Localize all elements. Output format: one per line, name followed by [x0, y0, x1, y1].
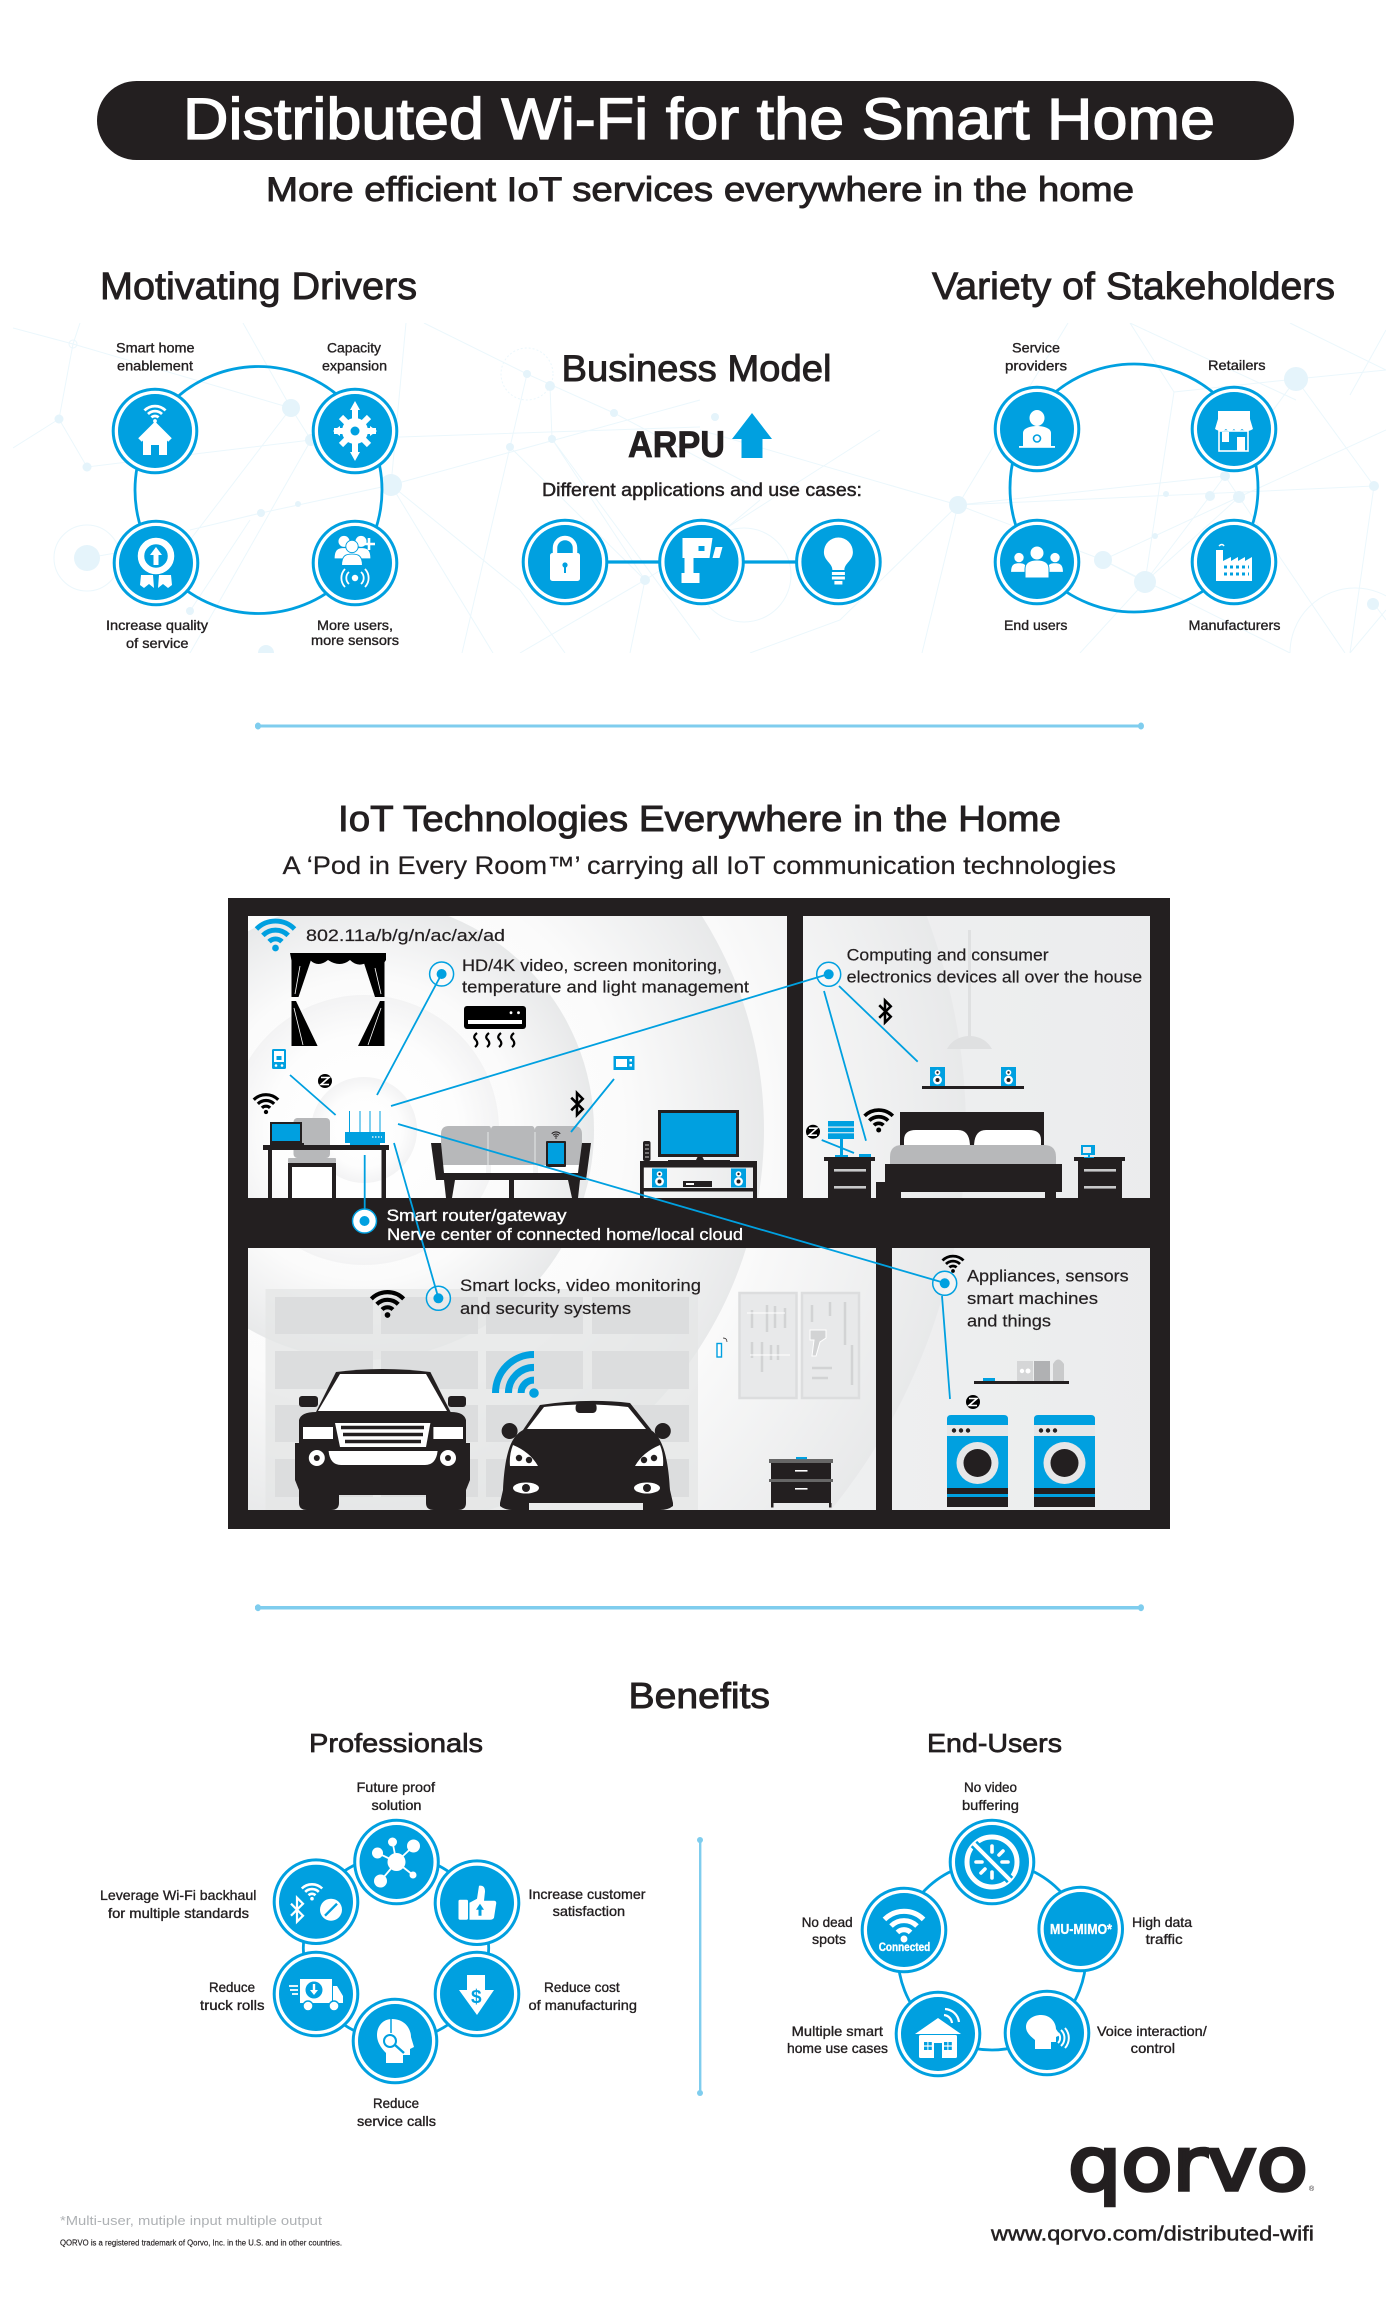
panel: end users	[787, 1728, 1207, 2076]
icon: standards	[274, 1860, 358, 1944]
label: smart home enablement: enablement	[117, 358, 193, 374]
label: increase quality of service: of service	[126, 635, 189, 651]
icon: bluetooth	[571, 1093, 583, 1115]
label: service calls: Reduce	[373, 2095, 419, 2111]
label: voice interaction: Voice interaction/	[1097, 2023, 1207, 2039]
bedroom	[806, 930, 1142, 1198]
icon: microwave	[614, 1056, 634, 1070]
label: multiple smart home: home use cases	[787, 2040, 888, 2056]
icon: smart home	[896, 1992, 980, 2076]
label: future proof: solution	[372, 1797, 422, 1813]
icon: zigbee	[318, 1074, 332, 1088]
icon: blue thermostat	[272, 1049, 286, 1069]
room backgrounds	[248, 916, 1150, 1510]
label: service providers: Service	[1012, 340, 1060, 356]
icon: router	[345, 1111, 385, 1146]
label: more users more sensors: More users,	[317, 617, 393, 633]
icon: security camera	[660, 520, 743, 604]
text: router label: Smart router/gateway	[386, 1206, 567, 1225]
icon: voice	[1005, 1991, 1089, 2075]
divider	[255, 1604, 1144, 1611]
heading: motivating drivers: Motivating Drivers	[100, 266, 417, 308]
label: manufacturing cost: of manufacturing	[528, 1997, 637, 2013]
subheading: professionals: Professionals	[309, 1728, 483, 1758]
label: voice interaction: control	[1131, 2040, 1175, 2056]
icon: connected: Connected	[879, 1940, 930, 1954]
wall shelf and speakers	[922, 1067, 1024, 1089]
SUV	[295, 1369, 470, 1510]
icon: smart home	[113, 389, 197, 473]
icon: light bulb	[797, 520, 880, 604]
callout: smart locks	[426, 1286, 450, 1310]
label: leverage wifi: Leverage Wi-Fi backhaul	[100, 1887, 256, 1903]
tablet	[546, 1132, 566, 1167]
label: no video buffering: buffering	[962, 1797, 1019, 1813]
label: high data traffic: High data	[1132, 1914, 1192, 1930]
text: smart locks: Smart locks, video monitoring	[460, 1276, 701, 1295]
icon: capacity expansion	[313, 389, 397, 473]
curtains	[290, 953, 386, 1046]
label: increase quality of service: Increase quality	[106, 617, 208, 633]
icon: zigbee	[966, 1395, 980, 1409]
sofa	[431, 1126, 591, 1198]
text: computing: Computing and consumer	[847, 946, 1049, 965]
footnote: trademark: QORVO is a registered trademark of Qorvo, Inc. in the U.S. and in other countries.	[60, 2239, 342, 2248]
icon: delivery truck	[274, 1952, 358, 2036]
pendant lamp	[947, 930, 992, 1049]
connector	[600, 560, 800, 564]
text: appliances: Appliances, sensors	[967, 1267, 1129, 1286]
icon: end users	[995, 520, 1079, 604]
icon: blue wifi	[488, 1347, 557, 1416]
living room	[254, 921, 757, 1198]
computer	[1081, 1145, 1095, 1158]
icon: cost down: $	[471, 1987, 482, 2008]
right nightstand	[1074, 1157, 1125, 1198]
panel: variety of stakeholders	[995, 340, 1280, 633]
house diagram	[228, 898, 1170, 1529]
label: more users more sensors: more sensors	[311, 632, 399, 648]
vertical divider	[697, 1837, 703, 2096]
sports car	[500, 1401, 673, 1510]
icon: wifi	[942, 1256, 964, 1273]
text: appliances: smart machines	[967, 1289, 1098, 1308]
label: no dead spots: spots	[812, 1931, 846, 1947]
text: appliances: and things	[967, 1312, 1051, 1331]
cabinet	[769, 1457, 833, 1508]
door sensor	[717, 1338, 727, 1357]
qorvo logo: qorvo	[1068, 2122, 1308, 2208]
icon: air conditioner	[464, 1006, 526, 1047]
title banner: Distributed Wi-Fi for the Smart Home	[183, 87, 1215, 152]
subtitle: More efficient IoT services everywhere in the home	[266, 171, 1134, 209]
background network pattern	[13, 323, 1386, 653]
icon: connected	[862, 1888, 946, 1972]
subheading: pod in every room: A ‘Pod in Every Room™’ carrying all IoT communication technologies	[282, 852, 1116, 880]
icon: MU-MIMO	[1039, 1887, 1122, 1971]
tv and media stand	[640, 1110, 757, 1198]
icon: support agent	[353, 1999, 437, 2083]
subheading: end users: End-Users	[927, 1728, 1062, 1758]
icon: cost down	[435, 1952, 519, 2036]
garage	[266, 1276, 859, 1510]
label: customer satisfaction: satisfaction	[553, 1903, 625, 1919]
icon: up arrow	[732, 413, 772, 458]
label: leverage wifi: for multiple standards	[108, 1905, 249, 1921]
callout: HD video	[430, 962, 454, 986]
text: HD video: HD/4K video, screen monitoring,	[462, 956, 722, 975]
icon: zigbee	[806, 1125, 820, 1139]
text: computing: electronics devices all over the house	[847, 968, 1142, 987]
laptop	[270, 1122, 304, 1145]
label: truck rolls: Reduce	[209, 1979, 255, 1995]
blue lamp	[828, 1121, 871, 1158]
icon: bluetooth	[879, 1001, 891, 1022]
router callout on dark band	[352, 1209, 377, 1233]
ARPU label: ARPU	[628, 424, 725, 465]
icon: lock	[523, 520, 607, 604]
text: smart locks: and security systems	[460, 1299, 631, 1318]
label: customer satisfaction: Increase customer	[528, 1886, 646, 1902]
website url: www.qorvo.com/distributed-wifi	[990, 2224, 1314, 2246]
wifi standards text: 802.11a/b/g/n/ac/ax/ad	[306, 926, 505, 945]
washer one	[947, 1415, 1008, 1507]
washer two	[1034, 1415, 1095, 1507]
qorvo logo: ®	[1309, 2185, 1315, 2193]
heading: benefits: Benefits	[628, 1675, 770, 1716]
label: smart home enablement: Smart home	[116, 340, 195, 356]
left nightstand	[824, 1157, 875, 1198]
callout connectors	[290, 974, 950, 1399]
label: high data traffic: traffic	[1146, 1931, 1183, 1947]
icon: no buffering	[950, 1820, 1034, 1904]
heading: IoT technologies: IoT Technologies Everywhere in the Home	[338, 798, 1061, 839]
label: capacity expansion: expansion	[322, 358, 387, 374]
tool boards	[740, 1293, 859, 1398]
desk and chair	[263, 1118, 389, 1198]
house frame	[228, 898, 1170, 1529]
footnote: MU-MIMO: *Multi-user, mutiple input multiple output	[60, 2213, 322, 2228]
icon: MU-MIMO: MU-MIMO*	[1050, 1921, 1112, 1938]
garage door	[266, 1289, 698, 1510]
bed	[876, 1112, 1062, 1198]
callout: appliances	[933, 1271, 957, 1295]
panel: motivating drivers	[106, 340, 399, 651]
icon: quality ribbon	[114, 521, 198, 605]
label: no dead spots: No dead	[802, 1914, 853, 1930]
icon: factory	[1192, 520, 1276, 604]
icon: service provider	[995, 387, 1079, 471]
label: truck rolls: truck rolls	[200, 1997, 264, 2013]
label: service calls: service calls	[357, 2113, 436, 2129]
icon: more users	[313, 521, 397, 605]
divider	[255, 722, 1144, 730]
heading: variety of stakeholders: Variety of Stakeholders	[932, 266, 1335, 308]
title banner	[97, 81, 1294, 160]
icon: wifi standard	[256, 921, 295, 951]
label: no video buffering: No video	[964, 1779, 1017, 1795]
label: end users: End users	[1004, 617, 1067, 633]
label: capacity expansion: Capacity	[327, 340, 381, 356]
label: future proof: Future proof	[356, 1779, 435, 1795]
icon: network hub	[355, 1820, 438, 1904]
use cases label: Different applications and use cases:	[542, 480, 862, 500]
label: service providers: providers	[1005, 358, 1067, 374]
label: manufacturing cost: Reduce cost	[544, 1979, 620, 1995]
icon: wifi	[371, 1292, 404, 1318]
icon: retailer	[1192, 387, 1276, 471]
label: retailers: Retailers	[1208, 357, 1266, 373]
heading: business model: Business Model	[562, 348, 832, 389]
panel: business model	[523, 348, 880, 604]
label: manufacturers: Manufacturers	[1188, 617, 1280, 633]
label: multiple smart home: Multiple smart	[792, 2023, 883, 2039]
callout: computing	[817, 962, 841, 986]
icon: thumbs up	[435, 1861, 519, 1944]
icon: wifi	[865, 1110, 893, 1132]
text: router label: Nerve center of connected home/local cloud	[387, 1225, 743, 1244]
shelf	[974, 1360, 1069, 1384]
panel: professionals	[100, 1728, 646, 2129]
text: HD video: temperature and light management	[462, 978, 749, 997]
icon: wifi	[254, 1095, 278, 1114]
appliance room	[933, 1256, 1129, 1507]
